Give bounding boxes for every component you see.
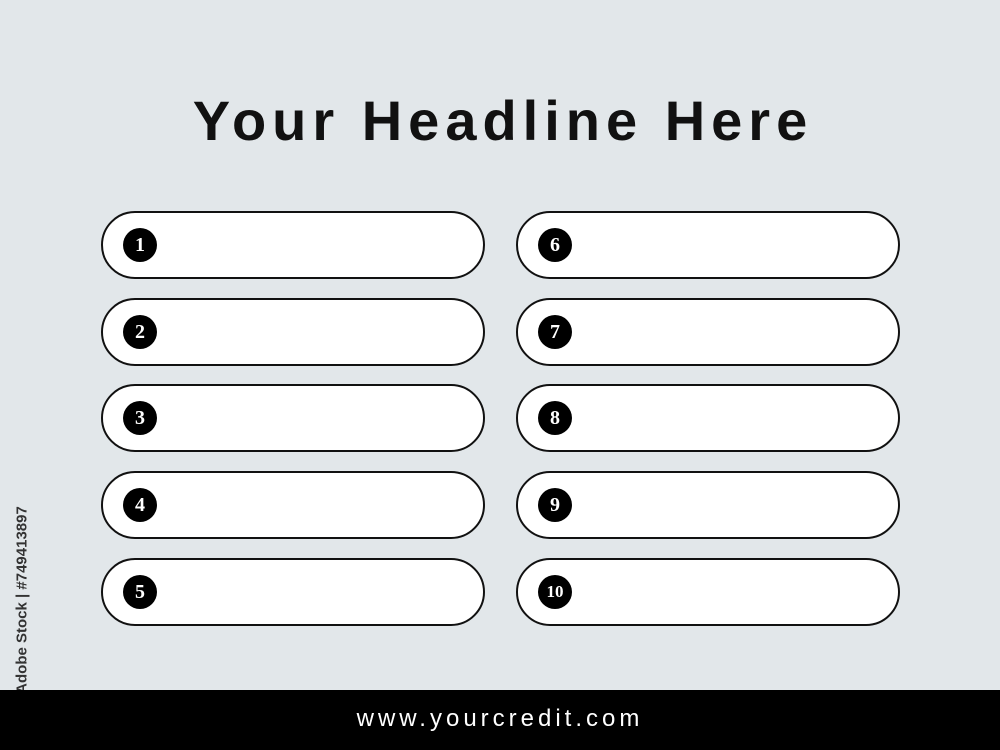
title: Your Headline Here: [193, 89, 813, 152]
pill 6: 6: [550, 234, 560, 256]
side credit: Adobe Stock | #749413897: [14, 506, 30, 694]
pill 8: 8: [550, 407, 560, 429]
pill 7: 7: [550, 321, 560, 343]
pill 10: 10: [546, 582, 564, 601]
pill 3: [101, 384, 485, 452]
pill 8: [516, 384, 900, 452]
pill 7: [516, 298, 900, 366]
pill 9: 9: [550, 494, 560, 516]
pill 4: 4: [135, 494, 145, 516]
pill 6: [516, 211, 900, 279]
pill 2: 2: [135, 321, 145, 343]
footer: [0, 690, 1000, 750]
pill 1: [101, 211, 485, 279]
pill 10: [516, 558, 900, 626]
pill 5: 5: [135, 581, 145, 603]
pill 3: 3: [135, 407, 145, 429]
pill 5: [101, 558, 485, 626]
pill 9: [516, 471, 900, 539]
footer: www.yourcredit.com: [357, 705, 643, 732]
pill 2: [101, 298, 485, 366]
pill 4: [101, 471, 485, 539]
pill 1: 1: [135, 234, 145, 256]
